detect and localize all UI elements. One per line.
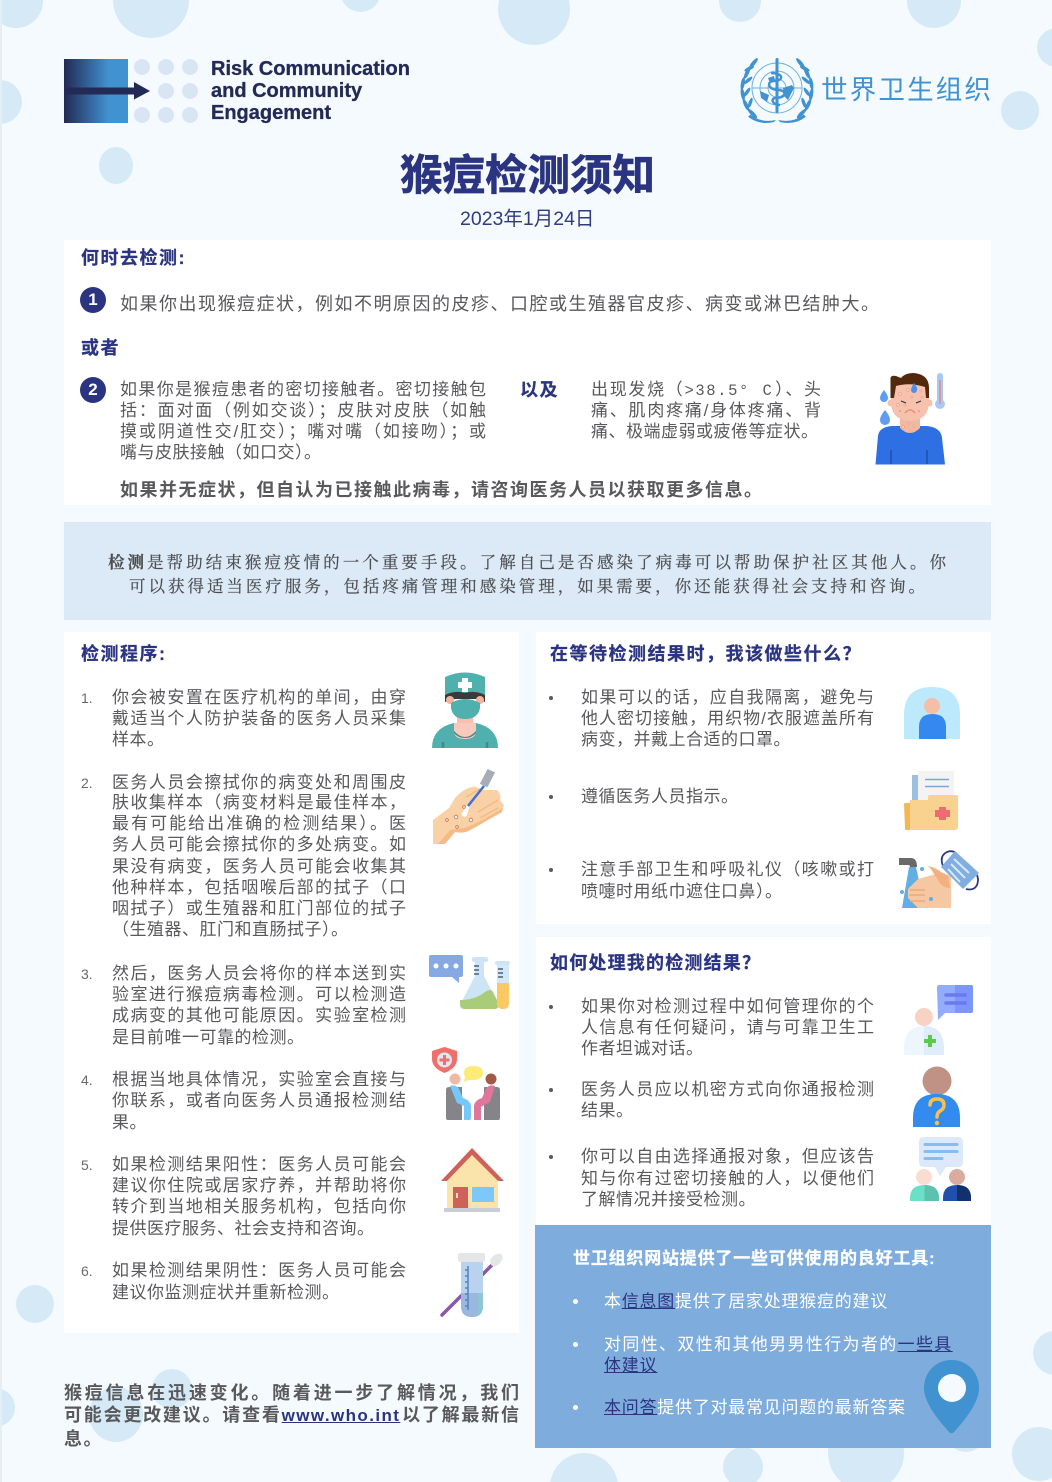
step 5: 如果检测结果阳性：医务人员可能会 — [112, 1155, 406, 1174]
step 1: 戴适当个人防护装备的医务人员采集 — [112, 709, 406, 728]
logo wordmark: and Community — [211, 80, 362, 102]
number badge 2 — [80, 377, 106, 403]
heading: while waiting: 在等待检测结果时，我该做些什么？ — [550, 644, 862, 664]
advice: discuss personal information: 人信息有任何疑问，请与可靠卫生工 — [581, 1018, 874, 1037]
icon: person with question mark — [913, 1066, 960, 1127]
advice: choose who to tell: 知与你有过密切接触的人，以便他们 — [581, 1169, 874, 1188]
symptoms text: 痛、肌肉疼痛/身体疼痛、背 — [591, 401, 821, 420]
condition 2 text: 嘴与皮肤接触（如口交）。 — [120, 443, 322, 462]
panel: why testing matters — [64, 522, 991, 620]
condition 2 text: 摸或阴道性交/肛交）；嘴对嘴（如接吻）；或 — [120, 422, 486, 441]
advice: follow instructions: 遵循医务人员指示。 — [581, 787, 738, 806]
step 4: 4. — [81, 1072, 93, 1088]
step 1: 样本。 — [112, 730, 164, 749]
step 2: 果没有病变，医务人员可能会收集其 — [112, 857, 406, 876]
WHO name: 世界卫生组织 — [821, 75, 993, 105]
step 5: 5. — [81, 1157, 93, 1173]
icon: hand with swab — [433, 769, 504, 844]
advice: hygiene: 注意手部卫生和呼吸礼仪（咳嗽或打 — [581, 860, 874, 879]
icon: test tube and swab — [440, 1253, 502, 1317]
step 2: （生殖器、肛门和直肠拭子）。 — [112, 920, 348, 939]
advice: confidential results: 医务人员应以机密方式向你通报检测 — [581, 1080, 874, 1099]
icon: handwashing and mask — [899, 850, 979, 908]
advice: discuss personal information: 作者坦诚对话。 — [581, 1039, 704, 1058]
icon: location pin — [924, 1360, 979, 1434]
panel: testing procedure — [64, 632, 519, 1333]
condition 2 text — [120, 380, 486, 462]
step 1: 1. — [81, 690, 93, 706]
advice: discuss personal information: 如果你对检测过程中如何管理你的个 — [581, 997, 874, 1016]
logo wordmark: Engagement — [211, 102, 331, 124]
step 2: 他种样本，包括咽喉后部的拭子（口 — [112, 878, 406, 897]
title: 猴痘检测须知 — [400, 153, 655, 200]
footer note: 可能会更改建议。请查看www.who.int以了解最新信 — [64, 1405, 519, 1425]
panel: how to handle results — [536, 937, 991, 1226]
step 3: 成病变的其他可能原因。实验室检测 — [112, 1006, 406, 1025]
intro line 1: 检测是帮助结束猴痘疫情的一个重要手段。了解自己是否感染了病毒可以帮助保护社区其他人。你 — [108, 553, 946, 572]
heading: testing procedure: 检测程序: — [81, 644, 166, 664]
tool: specific advice: 体建议 — [604, 1356, 657, 1375]
step 3: 是目前唯一可靠的检测。 — [112, 1028, 304, 1047]
advice: isolate: 他人密切接触，用织物/衣服遮盖所有 — [581, 709, 874, 728]
footer note: 息。 — [64, 1429, 103, 1449]
date: 2023年1月24日 — [460, 208, 594, 230]
step 2: 医务人员会擦拭你的病变处和周围皮 — [112, 773, 406, 792]
condition 2 text: 括：面对面（例如交谈）；皮肤对皮肤（如触 — [120, 401, 486, 420]
icon: person in isolation — [904, 687, 960, 739]
connector: and: 以及 — [520, 380, 559, 400]
tool: infographic: 本信息图提供了居家处理猴痘的建议 — [604, 1292, 888, 1311]
step 2: 最有可能给出准确的检测结果）。医 — [112, 814, 406, 833]
WHO emblem — [740, 58, 814, 123]
step 6: 建议你监测症状并重新检测。 — [112, 1283, 340, 1302]
heading: when to test: 何时去检测: — [81, 248, 186, 268]
step 5: 转介到当地相关服务机构，包括向你 — [112, 1197, 406, 1216]
step 6: 6. — [81, 1263, 93, 1279]
advice: choose who to tell — [549, 1147, 874, 1209]
step 4: 你联系，或者向医务人员通报检测结 — [112, 1091, 406, 1110]
panel: WHO tools — [535, 1225, 991, 1448]
number badge 2: 2 — [88, 380, 98, 399]
heading: or: 或者 — [81, 338, 120, 358]
logo: Risk Communication and Community Engagement — [64, 58, 410, 124]
icon: nurse — [432, 672, 498, 748]
advice: isolate — [549, 688, 874, 749]
condition 2 text: 如果你是猴痘患者的密切接触者。密切接触包 — [120, 380, 486, 399]
tool: Q&A: 本问答提供了对最常见问题的最新答案 — [604, 1398, 906, 1417]
icon: two people talking — [910, 1137, 971, 1201]
logo wordmark — [211, 58, 410, 124]
symptoms text: 出现发烧（>38.5° C）、头 — [591, 380, 821, 400]
icon: medical folder — [904, 771, 958, 830]
logo mark: gradient square with arrow and dots — [64, 59, 198, 123]
number badge 1 — [80, 287, 106, 313]
advice: confidential results — [549, 1080, 874, 1120]
step 4: 根据当地具体情况，实验室会直接与 — [112, 1070, 406, 1089]
step 3: 然后，医务人员会将你的样本送到实 — [112, 964, 406, 983]
footer note — [64, 1383, 519, 1449]
advice: discuss personal information — [549, 997, 874, 1058]
step 2: 2. — [81, 775, 93, 791]
logo wordmark: Risk Communication — [211, 58, 410, 80]
step 5: 提供医疗服务、社会支持和咨询。 — [112, 1219, 374, 1238]
step 5 — [81, 1155, 406, 1238]
footer note: 猴痘信息在迅速变化。随着进一步了解情况，我们 — [64, 1383, 519, 1403]
number badge 1: 1 — [88, 290, 98, 309]
advice: choose who to tell: 你可以自由选择通报对象，但应该告 — [581, 1147, 874, 1166]
step 4: 果。 — [112, 1113, 147, 1132]
step 6: 如果检测结果阴性：医务人员可能会 — [112, 1261, 406, 1280]
icon: health worker with speech bubble — [904, 985, 973, 1055]
panel: when to get tested — [64, 240, 991, 505]
icon: sick man with rash and thermometer — [876, 373, 945, 464]
step 4 — [81, 1070, 406, 1132]
logo: World Health Organization — [740, 58, 993, 123]
step 1: 你会被安置在医疗机构的单间，由穿 — [112, 688, 406, 707]
symptoms text: 痛、极端虚弱或疲倦等症状。 — [591, 422, 818, 441]
step 3: 3. — [81, 966, 93, 982]
tool: specific advice: 对同性、双性和其他男男性行为者的一些具 — [604, 1335, 953, 1354]
step 2: 咽拭子）或生殖器和肛门部位的拭子 — [112, 899, 406, 918]
heading: handle results: 如何处理我的检测结果？ — [550, 953, 761, 973]
step 3 — [81, 964, 406, 1047]
heading: useful tools: 世卫组织网站提供了一些可供使用的良好工具: — [573, 1249, 935, 1268]
icon: lab flask and test tube — [429, 955, 510, 1009]
step 5: 建议你住院或居家疗养，并帮助将你 — [112, 1176, 406, 1195]
step 6 — [81, 1261, 406, 1302]
intro line 2: 可以获得适当医疗服务，包括疼痛管理和感染管理，如果需要，你还能获得社会支持和咨询。 — [129, 577, 925, 596]
icon: consultation with shield — [432, 1047, 500, 1120]
step 1 — [81, 688, 406, 749]
step 2: 肤收集样本（病变材料是最佳样本， — [112, 793, 406, 812]
panel: while waiting for results — [536, 632, 991, 924]
advice: no symptoms: 如果并无症状，但自认为已接触此病毒，请咨询医务人员以获取更多信息。 — [120, 480, 764, 500]
step 2 — [81, 773, 406, 939]
advice: choose who to tell: 了解情况并接受检测。 — [581, 1190, 756, 1209]
symptoms text — [591, 380, 821, 441]
tool: specific advice — [573, 1335, 953, 1375]
advice: hygiene: 喷嚏时用纸巾遮住口鼻）。 — [581, 882, 782, 901]
step 3: 验室进行猴痘病毒检测。可以检测造 — [112, 985, 406, 1004]
advice: confidential results: 结果。 — [581, 1101, 634, 1120]
advice: hygiene — [549, 860, 874, 901]
advice: isolate: 如果可以的话，应自我隔离，避免与 — [581, 688, 874, 707]
advice: isolate: 病变，并戴上合适的口罩。 — [581, 730, 791, 749]
condition 1 text: 如果你出现猴痘症状，例如不明原因的皮疹、口腔或生殖器官皮疹、病变或淋巴结肿大。 — [120, 294, 879, 314]
icon: house — [441, 1148, 504, 1212]
step 2: 务人员可能会擦拭你的多处病变。如 — [112, 835, 406, 854]
